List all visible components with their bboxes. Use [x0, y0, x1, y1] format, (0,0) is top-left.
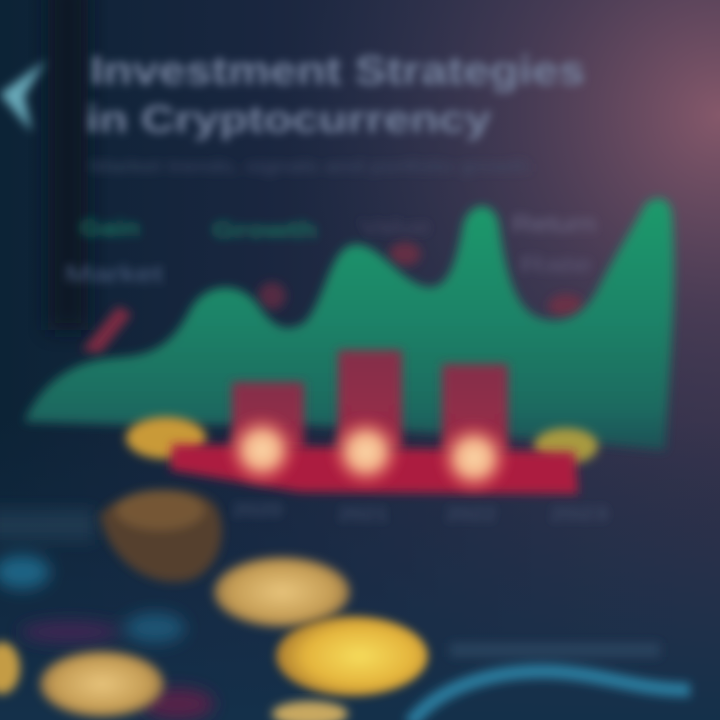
blue arc: [410, 650, 690, 720]
chart labels: [65, 211, 596, 288]
axis labels: 2022: [446, 504, 496, 524]
glowing markers: [226, 414, 510, 494]
red chart marks: [82, 242, 584, 354]
side coins: [126, 417, 598, 464]
chart labels: Value: [360, 217, 430, 239]
axis labels: 2020: [232, 500, 282, 520]
chart labels: Rate: [520, 252, 592, 277]
area chart: [24, 198, 674, 450]
chart labels: Return: [512, 211, 596, 238]
red band: [170, 444, 578, 494]
chart labels: Market: [65, 261, 163, 288]
title: in Cryptocurrency: [86, 99, 491, 141]
axis labels: [232, 500, 608, 524]
subtitle: Market trends, signals and portfolio growth: [90, 157, 530, 176]
red bars: [232, 350, 508, 454]
axis labels: 2023: [550, 504, 608, 524]
gold coins: [0, 557, 428, 720]
axis labels: 2021: [338, 504, 388, 524]
title: [86, 49, 585, 141]
decorative left panels: [0, 510, 214, 720]
chart labels: Gain: [80, 215, 140, 242]
chart labels: Growth: [212, 217, 317, 244]
title: Investment Strategies: [90, 49, 585, 93]
icon: logo arrow: [0, 60, 46, 132]
brown coin: [100, 490, 222, 582]
